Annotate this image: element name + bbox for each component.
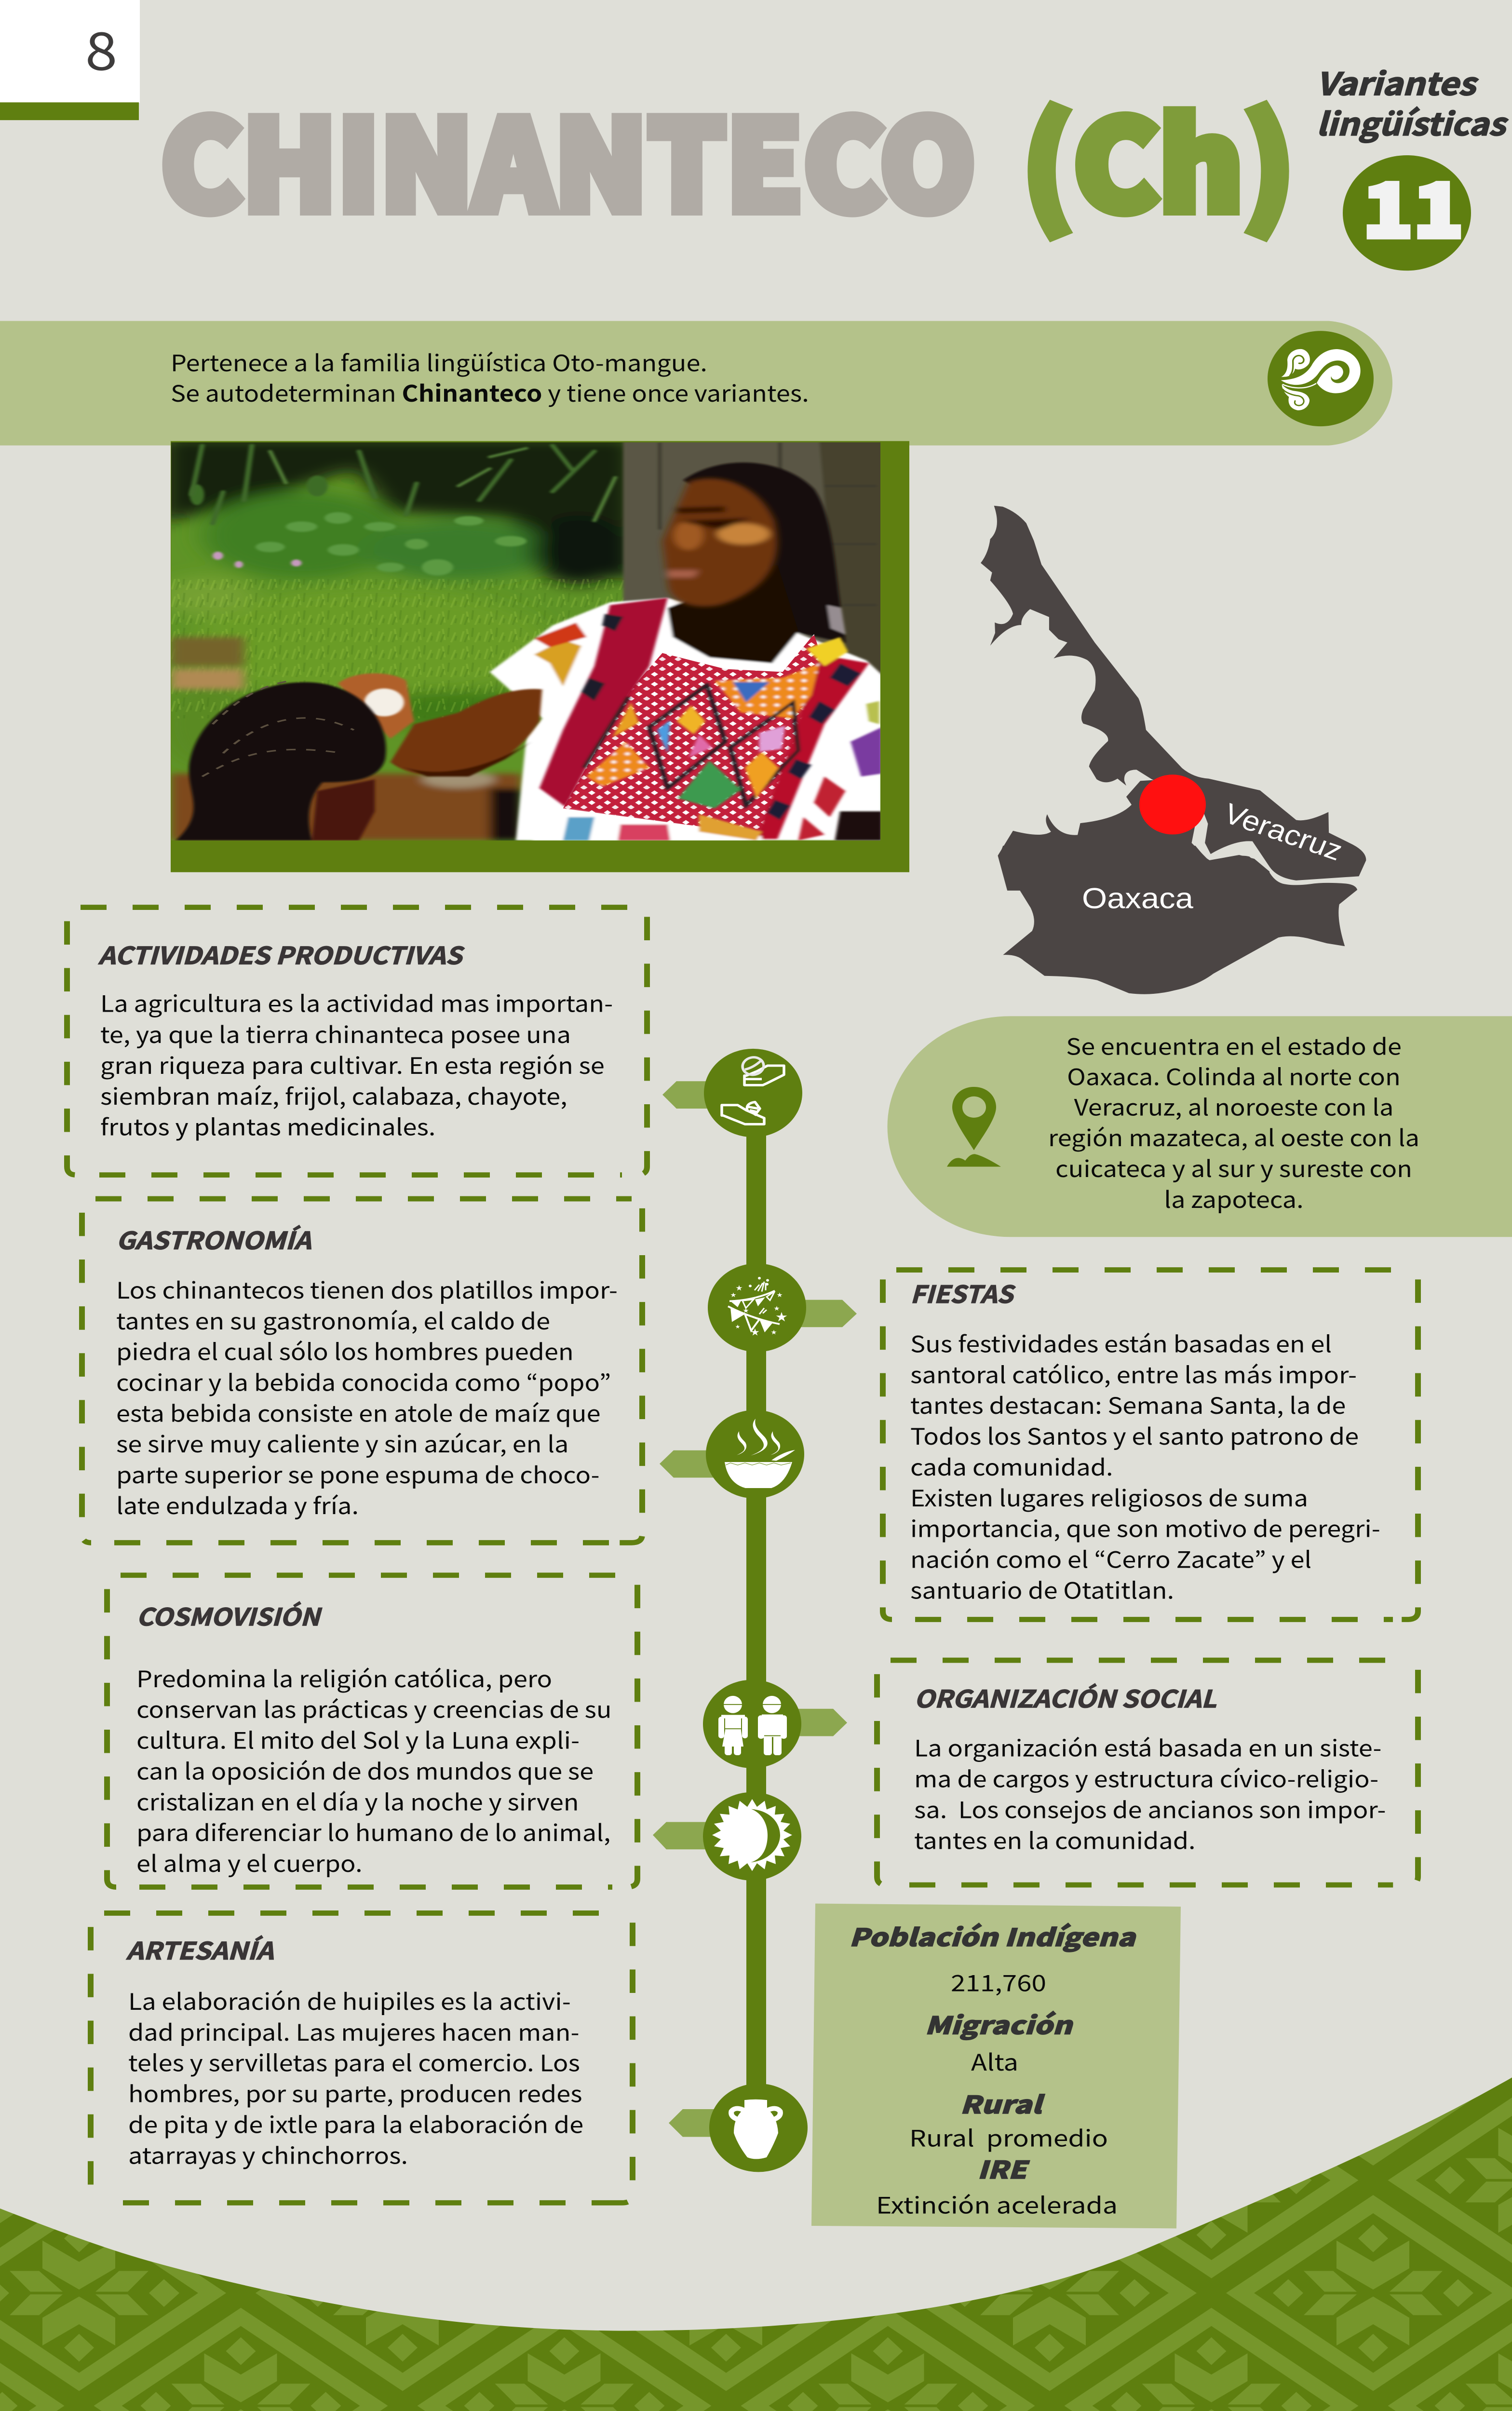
photo: woman in embroidered huipil with child <box>161 436 887 840</box>
heading: IRE: IRE <box>977 2151 1030 2186</box>
panel: crafts <box>91 1913 633 2203</box>
body text <box>100 986 613 1142</box>
body text: tantes en la comunidad. <box>914 1823 1196 1856</box>
body text: parte superior se pone espuma de choco- <box>116 1457 600 1490</box>
body text: se sirve muy caliente y sin azúcar, en la <box>116 1426 568 1459</box>
bottom woven pattern band <box>0 2017 1512 2411</box>
map label: Veracruz: Veracruz <box>1219 798 1347 867</box>
body text: cultura. El mito del Sol y la Luna expli- <box>136 1723 580 1756</box>
arrow: gastronomy <box>660 1450 718 1477</box>
value: migration: Alta <box>971 2045 1018 2077</box>
value: rural: Rural promedio <box>909 2120 1108 2154</box>
icon: festive bunting <box>708 1263 806 1352</box>
location marker <box>1139 774 1206 835</box>
timeline stem <box>746 1093 766 2128</box>
body text: dad principal. Las mujeres hacen man- <box>128 2015 580 2047</box>
heading: GASTRONOMÍA <box>116 1222 311 1257</box>
body text: Todos los Santos y el santo patrono de <box>910 1419 1359 1451</box>
title: (Ch) <box>1022 66 1295 247</box>
intro band <box>0 321 1392 446</box>
value: IRE: Extinción acelerada <box>876 2188 1118 2221</box>
arrow: crafts <box>669 2109 723 2137</box>
body text: para diferenciar lo humano de lo animal, <box>136 1815 610 1848</box>
icon: hands with seed <box>704 1049 802 1137</box>
icon: wind swirl <box>1268 331 1374 426</box>
heading: ORGANIZACIÓN SOCIAL <box>914 1680 1216 1715</box>
location text: Veracruz, al noroeste con la <box>1074 1089 1393 1123</box>
icon: steaming bowl <box>706 1410 804 1499</box>
panel: gastronomy <box>82 1199 642 1543</box>
body text: tantes en su gastronomía, el caldo de <box>116 1303 550 1336</box>
location panel <box>888 1016 1512 1237</box>
body text: el alma y el cuerpo. <box>136 1846 363 1879</box>
body text: cocinar y la bebida conocida como “popo” <box>116 1365 611 1398</box>
variants label <box>1316 60 1509 145</box>
body text: sa. Los consejos de ancianos son impor- <box>914 1792 1386 1825</box>
body text: esta bebida consiste en atole de maíz que <box>116 1395 600 1429</box>
body text: santoral católico, entre las más impor- <box>910 1357 1357 1390</box>
heading: FIESTAS <box>910 1275 1015 1310</box>
location text: cuicateca y al sur y sureste con <box>1055 1151 1412 1184</box>
body text: ma de cargos y estructura cívico-religio- <box>914 1761 1378 1794</box>
arrow: cosmovision <box>653 1822 714 1849</box>
body text: La elaboración de huipiles es la activi- <box>128 1984 571 2017</box>
body text: Predomina la religión católica, pero <box>136 1661 552 1694</box>
body text: piedra el cual sólo los hombres pueden <box>116 1334 574 1367</box>
variants label: Variantes <box>1316 60 1479 104</box>
heading: rural: Rural <box>960 2086 1045 2121</box>
location text: Se encuentra en el estado de <box>1066 1029 1402 1062</box>
timeline <box>653 1049 857 2172</box>
body text: conservan las prácticas y creencias de su <box>136 1692 612 1725</box>
body text: gran riqueza para cultivar. En esta región se <box>100 1048 605 1081</box>
title: CHINANTECO <box>161 66 976 247</box>
variants label: lingüísticas <box>1316 100 1509 145</box>
body text: frutos y plantas medicinales. <box>100 1110 435 1142</box>
variants count badge: 11 <box>1363 151 1464 259</box>
body text: Existen lugares religiosos de suma <box>910 1480 1308 1513</box>
intro text: Se autodeterminan Chinanteco y tiene once variantes. <box>171 376 809 408</box>
body text: La agricultura es la actividad mas importan- <box>100 986 613 1019</box>
heading: indigenous population: Población Indígena <box>849 1918 1137 1953</box>
heading: ACTIVIDADES PRODUCTIVAS <box>98 937 465 972</box>
arrow: festivals <box>796 1300 857 1327</box>
intro text: Pertenece a la familia lingüística Oto-mangue. <box>171 345 707 378</box>
panel: cosmovision <box>107 1575 637 1887</box>
body text: tantes destacan: Semana Santa, la de <box>910 1388 1346 1421</box>
body text: nación como el “Cerro Zacate” y el <box>910 1542 1311 1575</box>
panel: festivals <box>883 1270 1418 1620</box>
page number tab <box>0 0 140 120</box>
location text: región mazateca, al oeste con la <box>1048 1120 1419 1153</box>
heading: ARTESANÍA <box>126 1932 273 1967</box>
panel: statistics <box>811 1904 1181 2228</box>
body text: cada comunidad. <box>910 1449 1113 1482</box>
body text: Sus festividades están basadas en el <box>910 1327 1332 1359</box>
page number tab: 8 <box>85 10 117 85</box>
body text: cristalizan en el día y la noche y sirven <box>136 1784 579 1817</box>
body text: atarrayas y chinchorros. <box>128 2138 408 2171</box>
map label: Oaxaca: Oaxaca <box>1082 882 1193 915</box>
icon: man and woman <box>703 1680 801 1768</box>
location text: la zapoteca. <box>1164 1182 1304 1215</box>
body text: te, ya que la tierra chinanteca posee una <box>100 1017 571 1050</box>
location text: Oaxaca. Colinda al norte con <box>1067 1059 1401 1092</box>
body text: hombres, por su parte, producen redes <box>128 2076 582 2109</box>
arrow: productive activities <box>662 1081 714 1109</box>
body text: siembran maíz, frijol, calabaza, chayote, <box>100 1079 567 1111</box>
icon: sun and moon <box>703 1792 801 1881</box>
body text: can la oposición de dos mundos que se <box>136 1754 594 1787</box>
arrow: social organization <box>791 1709 847 1736</box>
icon: clay jar <box>709 2084 808 2172</box>
body text <box>128 1984 583 2171</box>
body text: importancia, que son motivo de peregri- <box>910 1511 1380 1544</box>
intro text <box>171 345 809 408</box>
heading: migration: Migración <box>925 2006 1074 2042</box>
map of Veracruz and Oaxaca <box>981 506 1366 994</box>
heading: COSMOVISIÓN <box>136 1598 323 1633</box>
body text: La organización está basada en un siste- <box>914 1731 1381 1763</box>
body text <box>910 1327 1380 1606</box>
panel: productive activities <box>67 908 647 1175</box>
body text: late endulzada y fría. <box>116 1488 359 1521</box>
panel: social organization <box>877 1660 1418 1885</box>
photo frame <box>161 436 909 872</box>
value: population: 211,760 <box>951 1965 1046 1998</box>
body text: teles y servilletas para el comercio. Los <box>128 2045 580 2078</box>
location text <box>1048 1029 1419 1215</box>
body text: de pita y de ixtle para la elaboración de <box>128 2107 583 2140</box>
body text <box>116 1273 618 1521</box>
body text: Los chinantecos tienen dos platillos impor- <box>116 1273 618 1305</box>
body text <box>914 1731 1386 1856</box>
icon: map pin <box>947 1087 1001 1167</box>
body text: santuario de Otatitlan. <box>910 1572 1174 1606</box>
body text <box>136 1661 612 1879</box>
